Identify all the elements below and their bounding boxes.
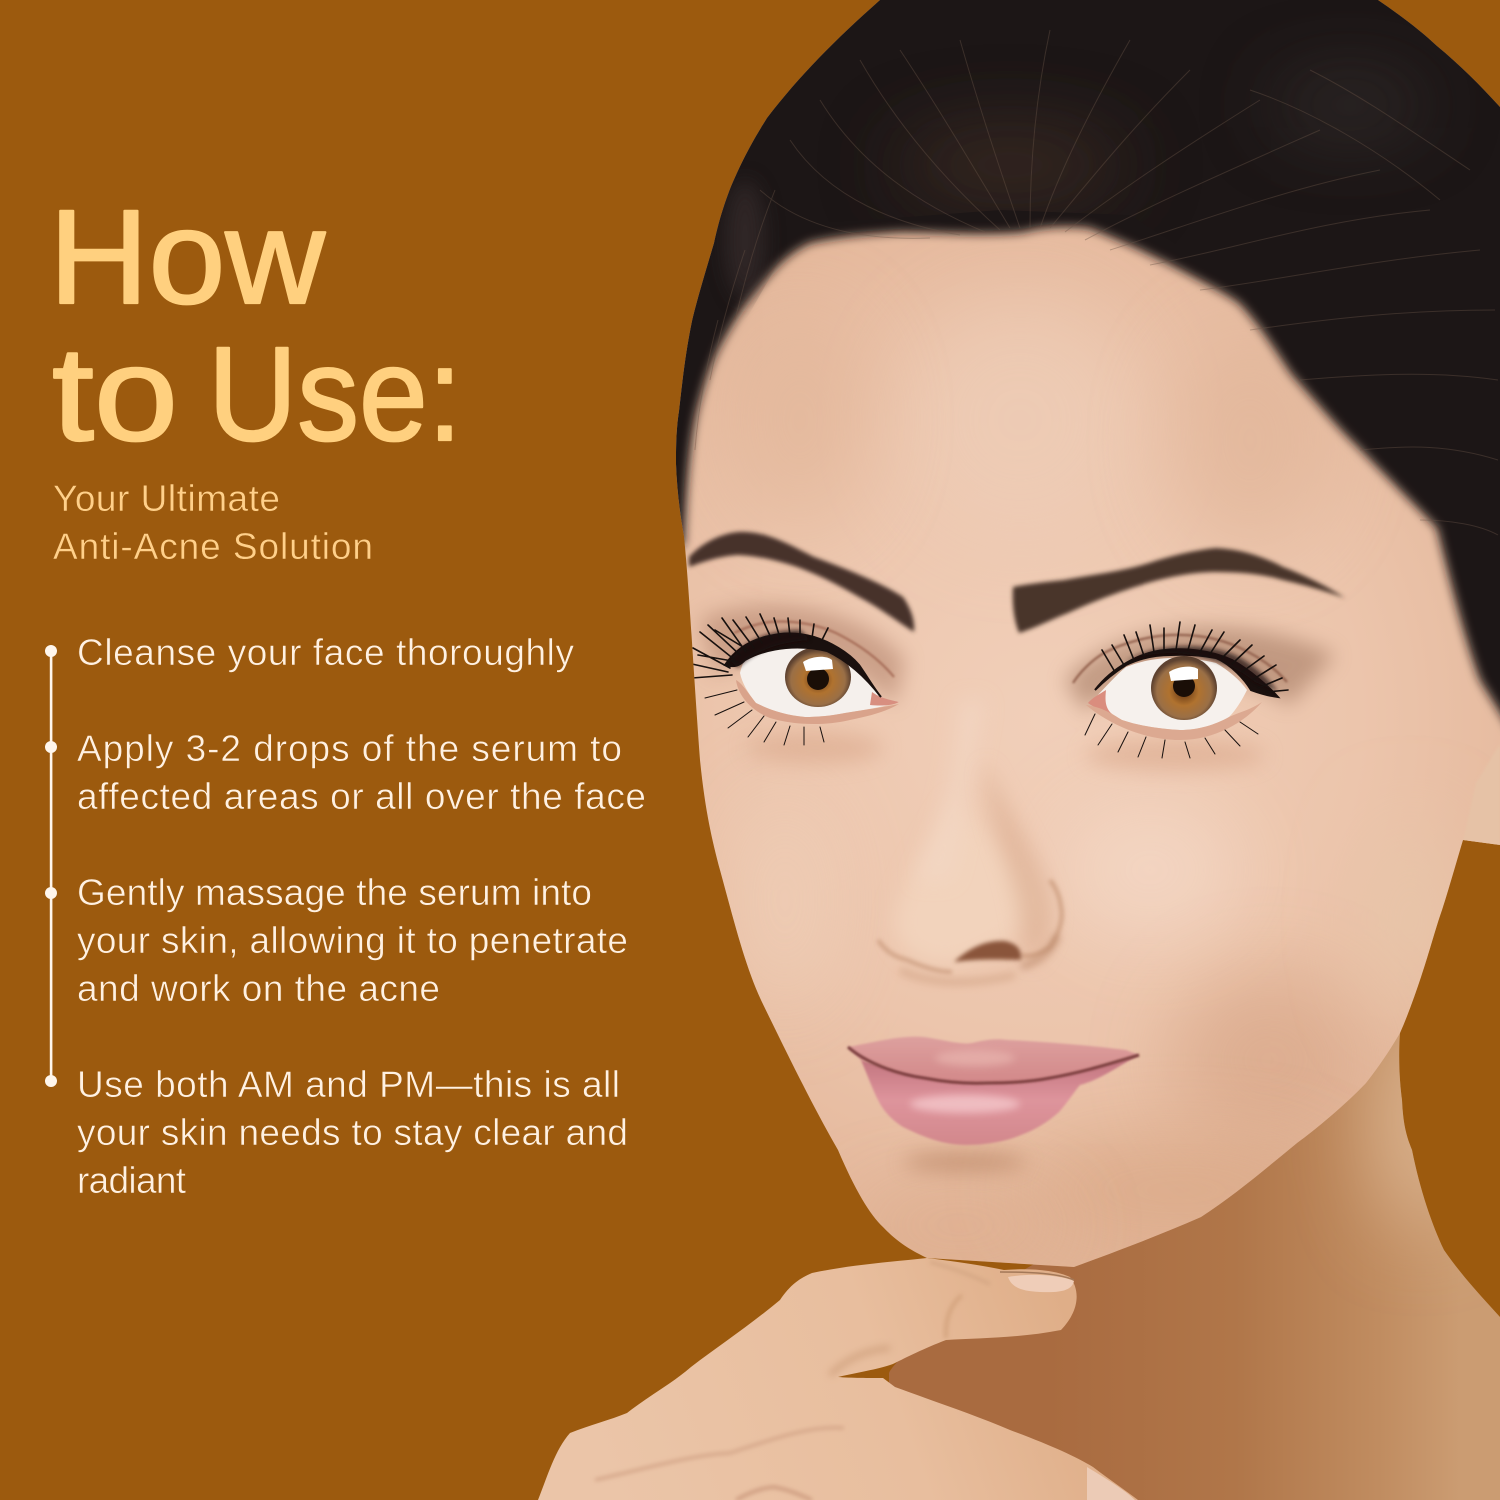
subtitle bbox=[53, 478, 373, 567]
neck bbox=[880, 1010, 1500, 1500]
skin shading bbox=[730, 300, 1445, 1255]
step 3 text: your skin, allowing it to penetrate bbox=[77, 920, 628, 961]
nose bbox=[876, 779, 1066, 988]
step 3 text: and work on the acne bbox=[77, 968, 440, 1009]
title bbox=[49, 183, 462, 469]
steps timeline bbox=[45, 645, 57, 1087]
step 4 text bbox=[77, 1064, 628, 1201]
ear bbox=[1462, 840, 1500, 845]
step 4 text: Use both AM and PM—this is all bbox=[77, 1064, 620, 1105]
step 4 text: radiant bbox=[77, 1160, 187, 1201]
left eyebrow bbox=[689, 532, 914, 632]
right eyebrow bbox=[1013, 548, 1345, 633]
step 3 text bbox=[77, 872, 628, 1009]
step 2 text: Apply 3-2 drops of the serum to bbox=[77, 728, 622, 769]
step 4 text: your skin needs to stay clear and bbox=[77, 1112, 628, 1153]
finger crease shading bbox=[830, 1348, 890, 1375]
portrait of woman bbox=[538, 0, 1500, 1500]
eyelid shadows bbox=[700, 605, 1335, 771]
step 2 text bbox=[77, 728, 646, 817]
lips bbox=[848, 1037, 1139, 1145]
title: How bbox=[49, 183, 326, 332]
left eye bbox=[692, 614, 899, 745]
subtitle: Anti-Acne Solution bbox=[53, 526, 373, 567]
hair bbox=[640, 0, 1500, 745]
title: Use: bbox=[208, 320, 462, 469]
step 3 text: Gently massage the serum into bbox=[77, 872, 592, 913]
face skin bbox=[660, 0, 1500, 1300]
hair tones bbox=[725, 80, 1430, 300]
right eye bbox=[1073, 622, 1288, 758]
thumb and hand bbox=[538, 1258, 1138, 1500]
step 1 text: Cleanse your face thoroughly bbox=[77, 632, 574, 673]
title: to bbox=[52, 320, 178, 469]
face and hair bbox=[640, 0, 1500, 1300]
lower nail bbox=[1087, 1467, 1135, 1500]
step 2 text: affected areas or all over the face bbox=[77, 776, 646, 817]
knuckle lines bbox=[595, 1428, 844, 1480]
subtitle: Your Ultimate bbox=[53, 478, 280, 519]
thumb nail bbox=[1008, 1275, 1074, 1292]
